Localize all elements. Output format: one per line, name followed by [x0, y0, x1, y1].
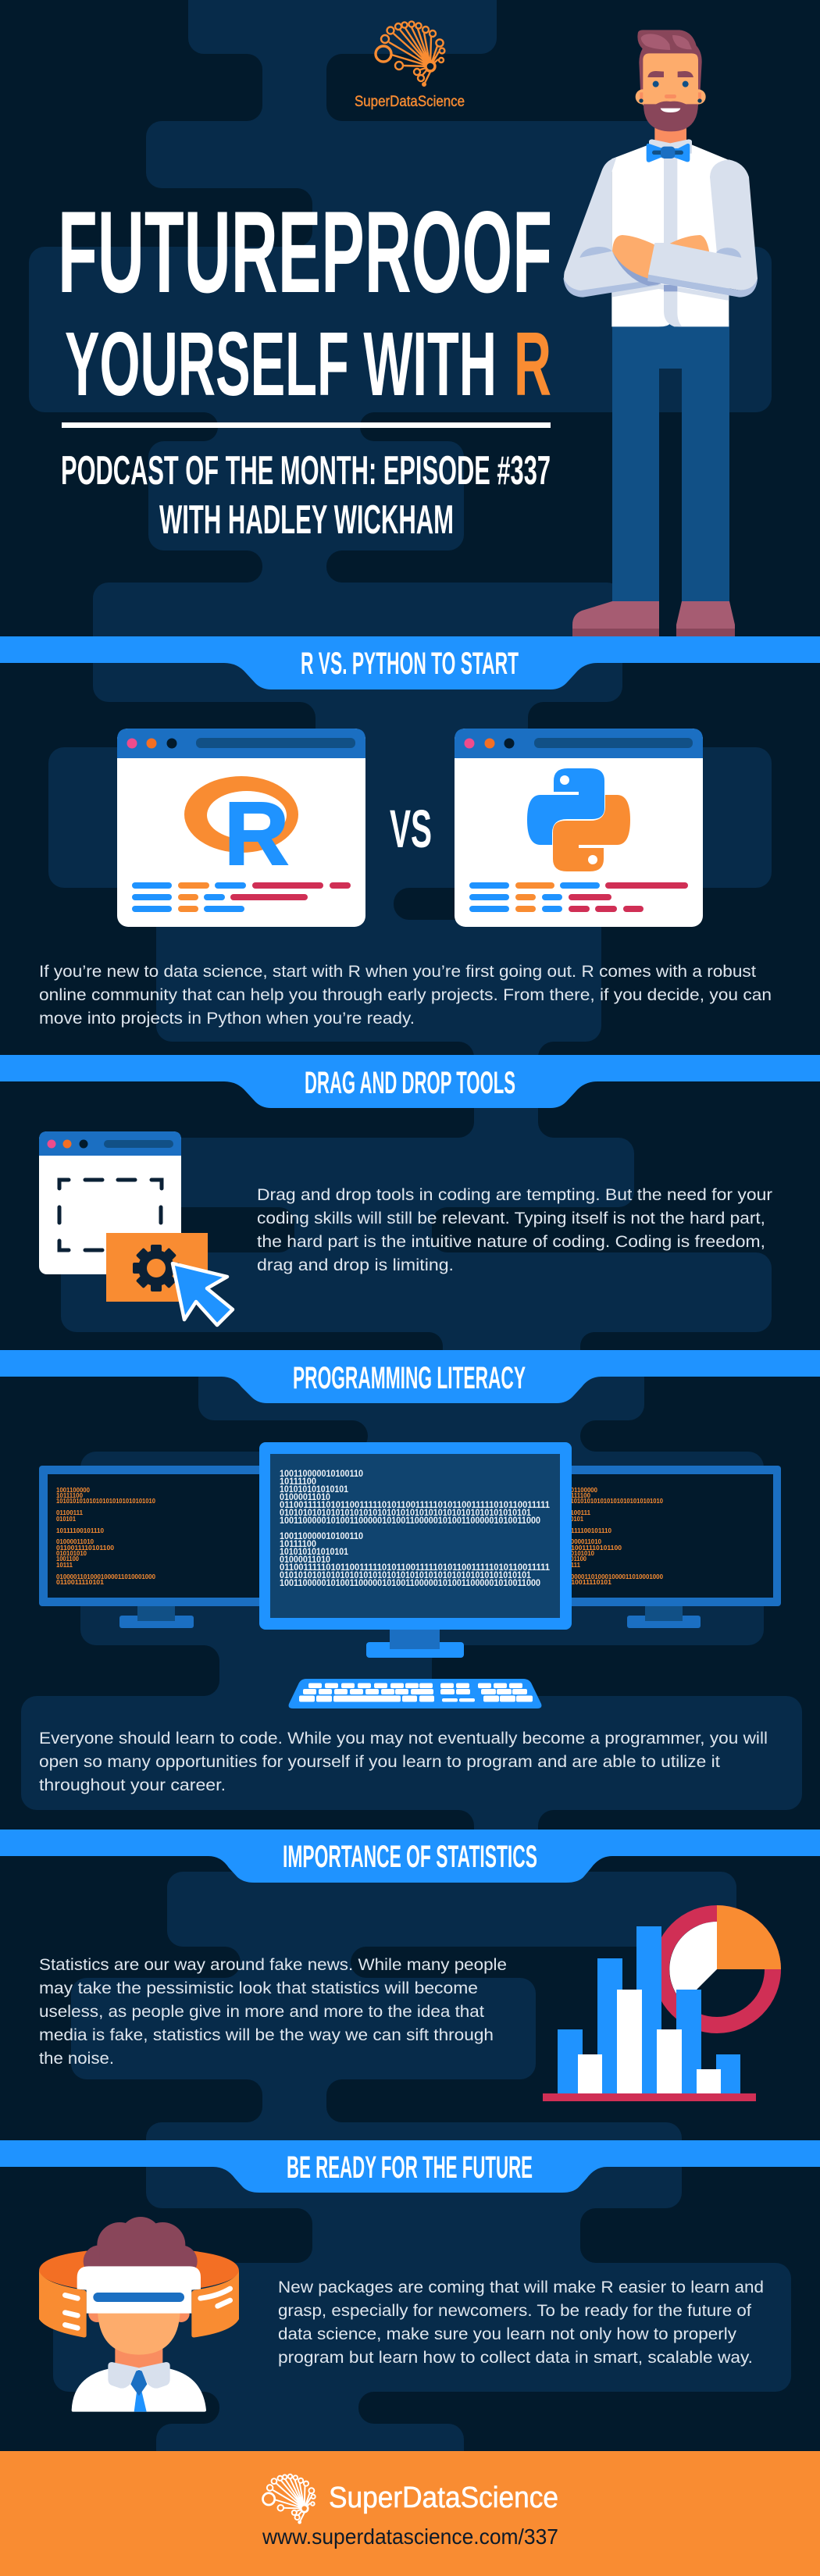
white binary code: 100110000010100110 — [280, 1532, 363, 1541]
orange binary code: 10111100 — [564, 1491, 590, 1499]
white binary code: 10011000001010011000001010011000001010011000001010011000 — [280, 1516, 540, 1526]
icon: gear — [133, 1245, 180, 1292]
left monitor — [39, 1466, 274, 1628]
orange binary code: 010101 — [56, 1515, 76, 1523]
text: R vs Python: If you’re new to data science, start with R when you’re first going out. R comes with a robust — [39, 963, 756, 981]
text panel: programming literacy: Everyone should learn to code. While you may not eventually become a programmer, you will — [39, 1730, 768, 1748]
illustration: man with crossed arms — [563, 30, 758, 636]
text: drag and drop — [257, 1186, 772, 1274]
orange R: R — [514, 313, 551, 415]
panel: Python window — [455, 729, 703, 927]
icon: person with VR headset — [39, 2217, 239, 2412]
text: be ready: data science, make sure you learn not only how to properly — [278, 2325, 737, 2343]
icon: white fan logo — [263, 2474, 316, 2523]
pie chart — [661, 1905, 781, 2026]
brand name: SuperDataScience — [355, 94, 465, 110]
text: statistics: the noise. — [39, 2050, 114, 2068]
orange binary code: 10111 — [56, 1561, 73, 1569]
white binary code: 01000011010 — [280, 1555, 330, 1565]
banner: R vs Python — [0, 636, 820, 689]
white binary code — [280, 1470, 551, 1588]
divider — [62, 422, 551, 428]
text: statistics: may take the pessimistic look that statistics will become — [39, 1979, 478, 1997]
banner: programming literacy: PROGRAMMING LITERACY — [293, 1361, 526, 1395]
text: be ready — [278, 2278, 764, 2367]
white binary code: 100110000010100110 — [280, 1470, 363, 1479]
text: be ready: program but learn how to collect data in smart, scalable way. — [278, 2349, 753, 2367]
banner: drag and drop: DRAG AND DROP TOOLS — [305, 1066, 515, 1100]
orange binary code: 1001100000 — [56, 1486, 90, 1494]
white binary code: 10111100 — [280, 1540, 316, 1549]
text: be ready: New packages are coming that will make R easier to learn and — [278, 2278, 764, 2296]
text: R vs Python: move into projects in Python when you’re ready. — [39, 1010, 415, 1028]
white binary code: 010101010101010101010101010101010101010101010101010101 — [280, 1571, 532, 1580]
orange binary code: 1001100 — [564, 1555, 586, 1562]
text: R vs Python: online community that can help you through early projects. From there, if you decide, you can — [39, 986, 772, 1004]
orange binary code: 10111 — [564, 1561, 580, 1569]
text: drag and drop: coding skills will still be relevant. Typing itself is not the hard part, — [257, 1210, 765, 1227]
banner: importance of statistics — [0, 1830, 820, 1883]
banner: be ready for the future — [0, 2140, 820, 2193]
orange binary code: 101010101010101010101010101010 — [564, 1497, 663, 1505]
icon: drag and drop window — [39, 1131, 233, 1325]
orange binary code: 1001100 — [56, 1555, 79, 1562]
text: drag and drop: Drag and drop tools in coding are tempting. But the need for your — [257, 1186, 772, 1204]
text: be ready: grasp, especially for newcomers. To be ready for the future of — [278, 2302, 751, 2320]
text panel: programming literacy: open so many opportunities for yourself if you learn to program and are able to utilize it — [39, 1753, 720, 1771]
icon: Python logo — [527, 768, 630, 871]
icon: R logo — [184, 776, 298, 884]
icon: fan logo — [376, 21, 444, 86]
white binary code: 10011000001010011000001010011000001010011000001010011000 — [280, 1579, 540, 1588]
subtitle line 2: WITH HADLEY WICKHAM — [159, 497, 454, 543]
text: statistics: media is fake, statistics will be the way we can sift through — [39, 2026, 494, 2044]
orange binary code — [564, 1486, 663, 1586]
orange binary code: 01000011010001000011010001000 — [56, 1573, 155, 1580]
orange binary code: 10111100101110 — [56, 1527, 104, 1534]
text: statistics: Statistics are our way around fake news. While many people — [39, 1956, 507, 1974]
orange binary code — [56, 1486, 155, 1586]
orange binary code: 01000011010 — [564, 1537, 601, 1545]
right monitor — [547, 1466, 781, 1628]
footer — [0, 2451, 820, 2576]
banner: be ready for the future: BE READY FOR THE FUTURE — [287, 2150, 533, 2185]
white binary code: 101010101010101 — [280, 1548, 349, 1557]
text: drag and drop: drag and drop is limiting. — [257, 1256, 454, 1274]
orange binary code: 01000011010001000011010001000 — [564, 1573, 663, 1580]
white binary code: 0110011111010110011111010110011111010110011111010110011111 — [280, 1501, 551, 1510]
icon: cursor arrow — [173, 1263, 233, 1325]
text: statistics — [39, 1956, 507, 2068]
white binary code: 0110011111010110011111010110011111010110011111010110011111 — [280, 1563, 551, 1573]
orange binary code: 0110011110101 — [564, 1578, 611, 1586]
orange binary code: 01000011010 — [56, 1537, 94, 1545]
orange binary code: 0110011110101 — [56, 1578, 104, 1586]
text: R vs Python — [39, 963, 772, 1028]
chart: pie and bars — [543, 1905, 781, 2101]
white binary code: 101010101010101 — [280, 1485, 349, 1495]
orange binary code: 0110011110101100 — [564, 1544, 622, 1552]
upper body and head — [563, 30, 758, 326]
orange binary code: 010101010 — [564, 1549, 594, 1557]
orange binary code: 10111100 — [56, 1491, 83, 1499]
white binary code: 01000011010 — [280, 1493, 330, 1502]
white binary code: 010101010101010101010101010101010101010101010101010101 — [280, 1509, 532, 1518]
text: drag and drop: the hard part is the intuitive nature of coding. Coding is freedom, — [257, 1233, 765, 1251]
icon: R logo: R — [224, 784, 289, 884]
icon: keyboard — [289, 1679, 541, 1708]
VS label: VS — [390, 799, 432, 859]
text panel: programming literacy — [39, 1730, 768, 1794]
orange binary code: 01100111 — [564, 1509, 590, 1516]
orange binary code: 01100111 — [56, 1509, 83, 1516]
banner: importance of statistics: IMPORTANCE OF STATISTICS — [283, 1840, 537, 1874]
bar chart — [543, 1926, 756, 2101]
orange binary code: 0110011110101100 — [56, 1544, 114, 1552]
orange binary code: 1001100000 — [564, 1486, 597, 1494]
legs and shoes — [572, 320, 735, 636]
white binary code: 10111100 — [280, 1477, 316, 1487]
title — [58, 187, 552, 543]
title line 2: YOURSELF WITH — [65, 313, 497, 415]
top logo — [355, 21, 465, 110]
orange binary code: 10111100101110 — [564, 1527, 611, 1534]
banner: R vs Python: R VS. PYTHON TO START — [301, 647, 519, 681]
footer brand name: SuperDataScience — [329, 2482, 558, 2514]
code lines — [469, 882, 688, 912]
center monitor — [259, 1442, 572, 1658]
orange binary code: 101010101010101010101010101010 — [56, 1497, 155, 1505]
footer url: www.superdatascience.com/337 — [262, 2524, 558, 2549]
text panel: programming literacy: throughout your career. — [39, 1776, 226, 1794]
orange binary code: 010101010 — [56, 1549, 87, 1557]
banner: programming literacy — [0, 1350, 820, 1403]
panel: R window — [117, 729, 365, 927]
orange binary code: 010101 — [564, 1515, 583, 1523]
code lines — [132, 882, 351, 912]
text: statistics: useless, as people give in more and more to the idea that — [39, 2003, 484, 2021]
banner: drag and drop — [0, 1055, 820, 1108]
